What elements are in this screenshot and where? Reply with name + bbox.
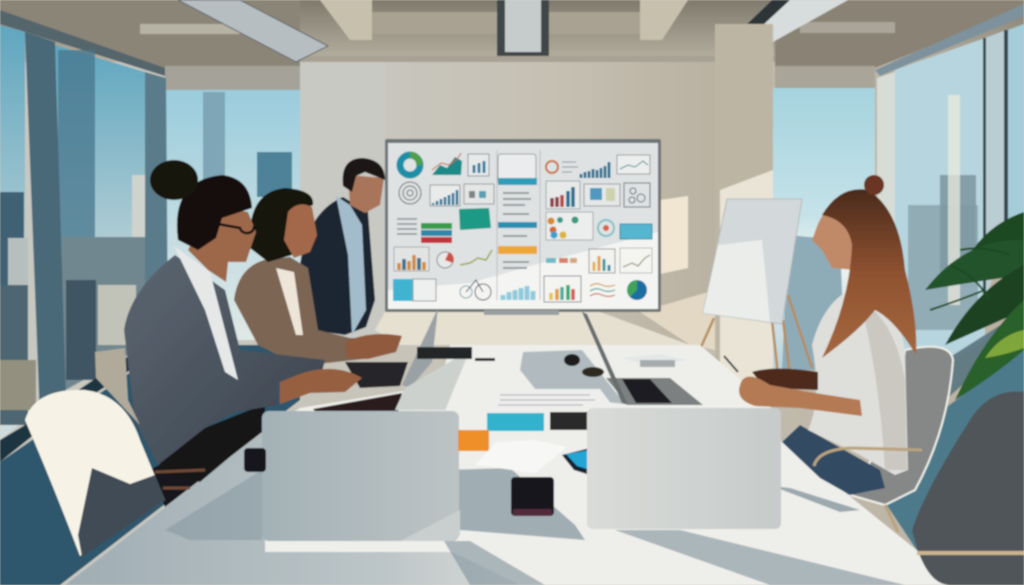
gear panel [624, 183, 650, 207]
floor left [0, 345, 300, 585]
area chart [432, 157, 462, 175]
smartphone [511, 477, 554, 516]
left city skyline [0, 152, 292, 425]
mouse and clutter [475, 354, 688, 377]
desk papers [458, 389, 612, 475]
man with bun [124, 160, 362, 482]
donut chart top left [400, 155, 420, 175]
woman on right [724, 175, 953, 532]
face [284, 204, 317, 258]
hair [177, 175, 252, 250]
pie icon [437, 252, 454, 268]
long hair [822, 189, 916, 358]
standing man hair [343, 158, 385, 192]
standing man jacket [298, 197, 375, 335]
hand [345, 334, 402, 359]
target icon [598, 220, 614, 236]
right city skyline [782, 95, 978, 370]
shirt shaded sleeve [860, 300, 907, 470]
left windows [0, 25, 300, 440]
hair bun [864, 175, 884, 195]
whiteboard surface [388, 143, 658, 309]
blue panel [584, 184, 620, 206]
front chair left [25, 390, 205, 557]
front laptop left [262, 411, 460, 541]
hand [280, 369, 362, 404]
teal panel [620, 224, 652, 239]
multi colour bars lower [544, 276, 581, 302]
ceiling light right [722, 0, 848, 57]
white shirt [808, 285, 908, 475]
whiteboard [385, 139, 661, 315]
centre wall and sunlight [300, 62, 715, 350]
dark tablet on table [417, 347, 472, 359]
centre column cards [498, 154, 537, 268]
line chart panel [617, 155, 650, 174]
whiteboard tray [484, 310, 559, 315]
table shadows [165, 348, 905, 585]
front chair right [912, 392, 1024, 585]
easel [693, 199, 812, 375]
small panel [464, 184, 494, 204]
standing man shirt [336, 196, 366, 335]
gauge icon [546, 161, 578, 173]
coloured bars panel [589, 249, 615, 273]
laptop left row front [313, 350, 470, 411]
small bars [474, 161, 484, 173]
grey suit jacket [124, 255, 325, 465]
blue bars top [581, 162, 609, 178]
neck and face [188, 206, 256, 282]
table shadow front left [65, 430, 520, 585]
forearm [739, 376, 862, 416]
trend panel [620, 248, 652, 273]
floor right [870, 350, 1024, 585]
trousers [150, 405, 262, 482]
potted plant [925, 212, 1024, 400]
jeans [782, 425, 885, 495]
woman in brown blazer [234, 188, 402, 366]
right window frames [875, 30, 1024, 445]
small chips [546, 258, 577, 263]
blouse [276, 268, 303, 335]
blue bar chart [430, 185, 460, 206]
stacked list bars [421, 223, 452, 243]
pen [724, 356, 738, 372]
face [812, 204, 855, 270]
blue block [393, 279, 436, 301]
multicolour bar chart [394, 247, 429, 271]
ceiling duct left [178, 0, 328, 62]
dark area under the table left [150, 405, 265, 507]
hair bun [150, 160, 198, 200]
red blue bars [546, 181, 580, 209]
brown blazer [234, 257, 372, 366]
area chart line [432, 153, 461, 170]
table [65, 345, 960, 585]
pie chart bottom right [627, 280, 647, 300]
dark device beside laptop [244, 448, 266, 472]
whiteboard frame [385, 139, 661, 312]
standing man [298, 158, 385, 335]
ceiling vent centre [497, 0, 549, 56]
wavy lines [590, 284, 615, 296]
right laptop behind [582, 312, 703, 405]
hair [250, 188, 313, 262]
bicycle sketch [460, 280, 491, 300]
trend line [460, 250, 492, 265]
ceiling [0, 0, 1024, 90]
line divider column [497, 150, 540, 300]
list lines [397, 219, 417, 234]
chair arm and legs [814, 448, 922, 532]
light blue area bars [503, 286, 533, 300]
left window frames [0, 32, 168, 462]
whiteboard sunlit area [388, 232, 658, 309]
standing man face [348, 175, 384, 213]
donut segments [410, 152, 423, 165]
glasses [218, 224, 254, 233]
right chair [850, 347, 953, 505]
laptop behind left [345, 308, 438, 388]
white shirt [174, 246, 238, 380]
colourful circles panel [546, 212, 593, 240]
back chair left [95, 348, 140, 425]
small bar chart frame [468, 154, 489, 176]
concentric circle icon [399, 182, 421, 204]
far arm [752, 368, 818, 390]
structural column [715, 24, 773, 380]
right windows [773, 24, 1024, 400]
teal note [459, 208, 491, 230]
front laptop right [587, 408, 781, 529]
